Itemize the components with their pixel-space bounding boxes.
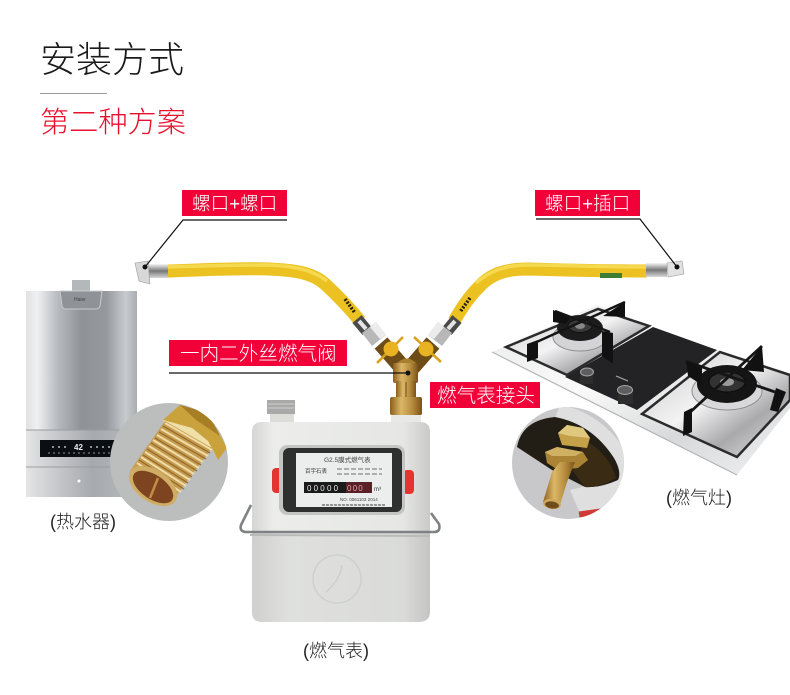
meter inlet spigot: [267, 400, 295, 424]
meter strap: [241, 505, 439, 532]
meter faceplate: NO. 0061103 2014: [340, 497, 378, 502]
right connector: [412, 319, 457, 367]
meter faceplate: G2.5膜式燃气表: [324, 455, 371, 464]
meter faceplate: [279, 445, 405, 515]
right valve handle: [414, 337, 441, 362]
water heater: [26, 280, 137, 497]
left connector: [357, 319, 402, 367]
left hose: [135, 261, 360, 321]
right hose: [454, 261, 684, 321]
meter counter: 00000: [307, 484, 340, 493]
inset: male thread fitting: [110, 403, 228, 521]
label: gas stove: (燃气灶): [666, 488, 732, 508]
callout: thread to socket: [535, 190, 680, 270]
left valve handle: [377, 337, 403, 363]
meter faceplate: 百宇石表: [305, 467, 328, 475]
label: gas meter: (燃气表): [303, 641, 369, 661]
title: 安装方式: [40, 39, 184, 80]
callout: valve: 一内二外丝燃气阀: [180, 343, 337, 365]
right burner tray: [642, 346, 790, 457]
meter counter: [304, 482, 381, 493]
stove glass panel: [565, 327, 717, 410]
heater display: [40, 440, 118, 457]
callout: thread to thread: 螺口+螺口: [192, 193, 277, 214]
gas meter: [241, 400, 439, 622]
two-way gas valve: [357, 319, 457, 415]
callout: meter connector: 燃气表接头: [437, 385, 535, 407]
meter counter: 000: [347, 484, 364, 493]
right hose end fitting: [646, 261, 684, 277]
meter counter: m³: [374, 487, 381, 493]
meter emboss circle: [313, 555, 361, 603]
label: water heater: (热水器): [50, 512, 116, 532]
left burner tray: [506, 302, 649, 375]
water heater: Haier: [74, 297, 86, 303]
subtitle: 第二种方案: [40, 106, 186, 139]
brass body: [390, 358, 422, 415]
heater display: 42: [74, 443, 83, 452]
gas stove: [492, 302, 790, 475]
callout: valve: [169, 340, 410, 376]
meter red tabs: [272, 468, 283, 493]
left hose end fitting: [135, 261, 168, 284]
callout: thread to thread: [142, 190, 287, 270]
callout: thread to socket: 螺口+插口: [545, 193, 630, 214]
stove knobs: [580, 368, 633, 404]
inset: gas nozzle fitting: [512, 405, 628, 525]
